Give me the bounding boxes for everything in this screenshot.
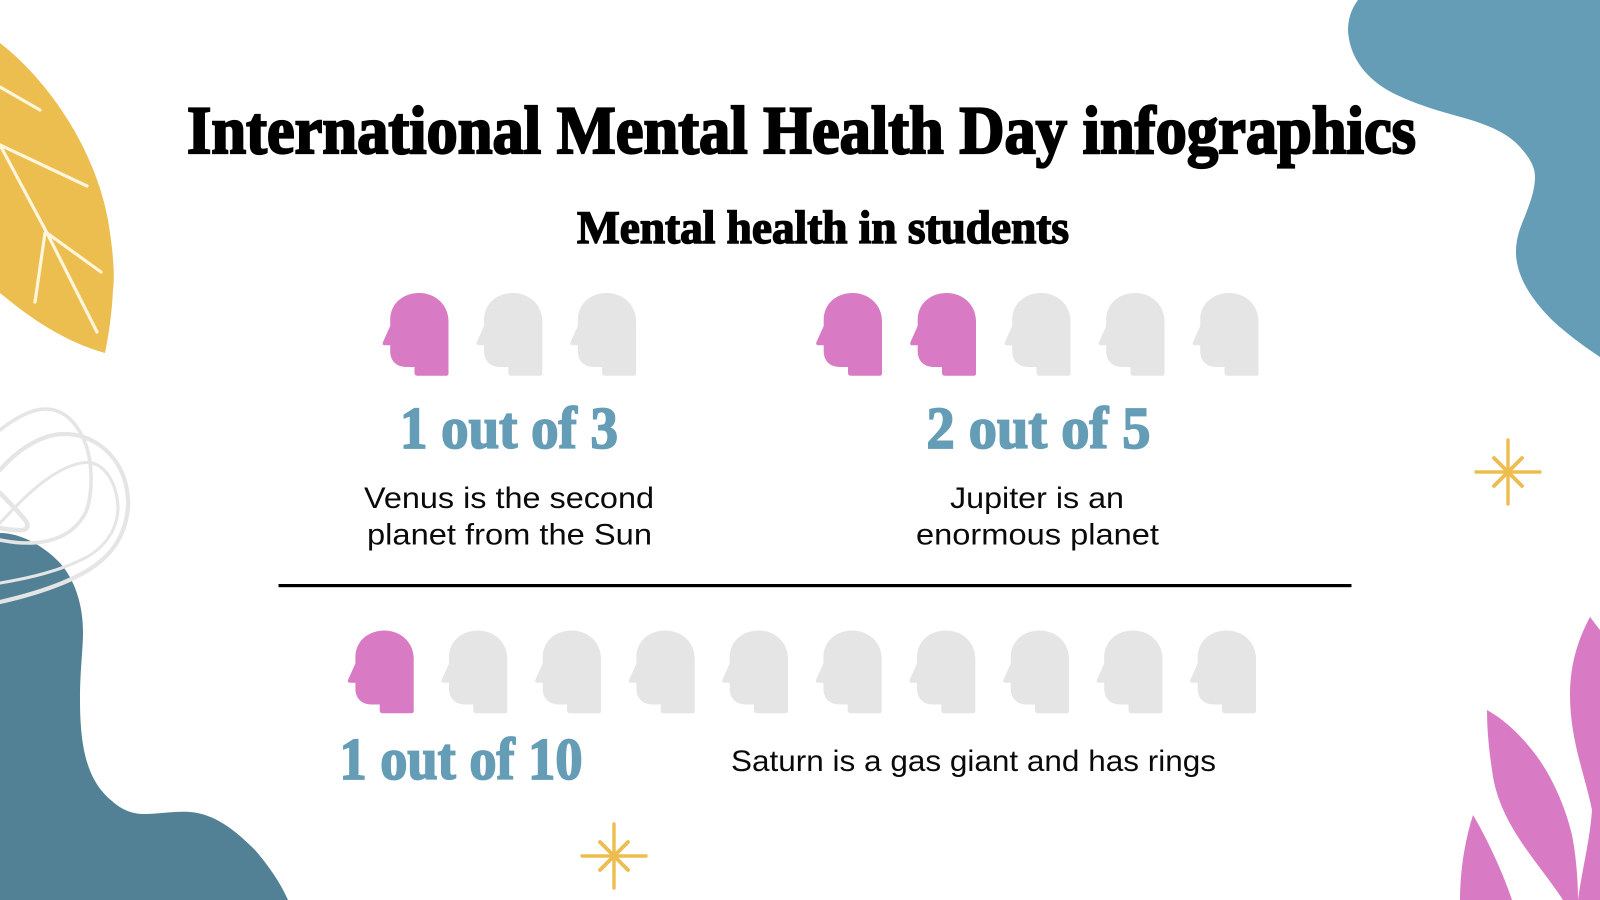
stat: 1 out of 10: 1 out of 10 [340,726,582,792]
decoration: pink plant [1460,617,1600,900]
text: Saturn description: Saturn is a gas giant and has rings [731,745,1216,778]
panel: 2 out of 5 [816,293,1258,552]
decoration: top right blue blob [1348,0,1600,357]
text: Jupiter description: enormous planet [916,518,1160,552]
decoration: bottom left teal blob [0,533,288,900]
text: Venus description: Venus is the second [364,482,654,515]
decoration: yellow leaf [0,43,114,353]
stat: 1 out of 3: 1 out of 3 [400,395,618,461]
text: Jupiter description: Jupiter is an [950,482,1124,515]
title: International Mental Health Day infographics [187,92,1416,168]
stat: 2 out of 5: 2 out of 5 [926,395,1150,461]
icons: 1 of 3 heads [383,293,636,376]
panel: 1 out of 3 [364,293,654,552]
text: Venus description: planet from the Sun [367,518,652,552]
text: Venus description [364,482,654,552]
icons: 1 of 10 heads [348,630,1256,713]
subtitle: Mental health in students [577,202,1069,254]
icon: yellow sparkle bottom [582,824,646,888]
panel: 1 out of 10 [340,630,1256,792]
decoration: scribble [0,409,128,602]
icons: 2 of 5 heads [816,293,1258,376]
text: Jupiter description [916,482,1160,552]
icon: yellow sparkle right [1476,440,1540,504]
